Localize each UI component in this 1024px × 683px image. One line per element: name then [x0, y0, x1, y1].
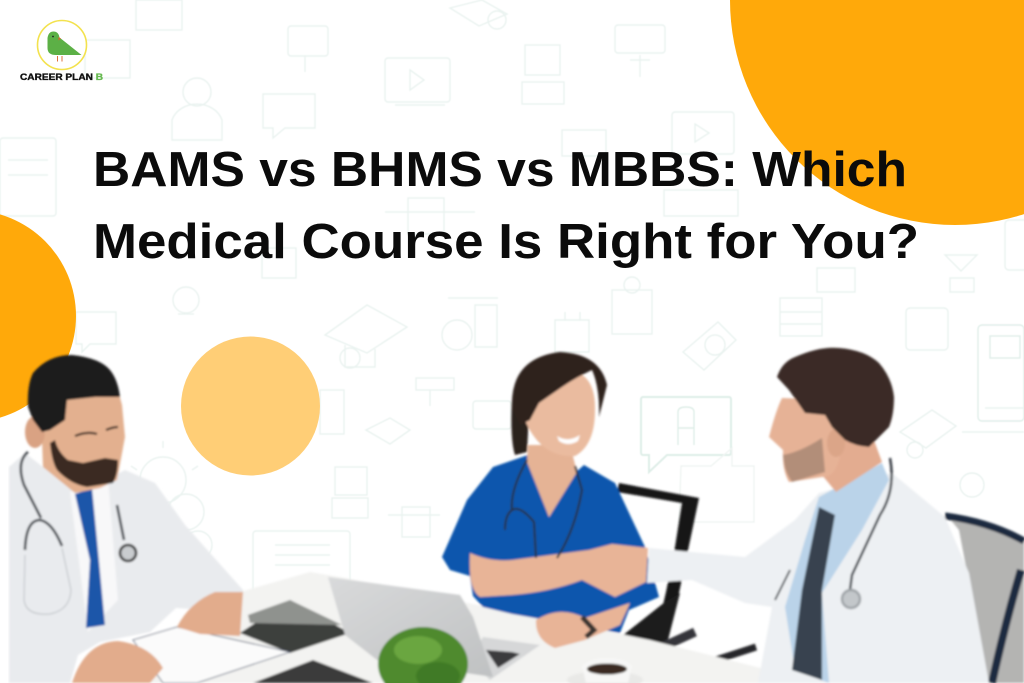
white coat [647, 473, 989, 683]
neck [527, 445, 577, 517]
title line 1: BAMS vs BHMS vs MBBS: Which [93, 143, 907, 197]
title line 2: Medical Course Is Right for You? [93, 215, 919, 269]
light blue shirt [785, 463, 889, 683]
left doctor [9, 355, 243, 683]
green plant [378, 627, 468, 683]
lower hand [72, 641, 163, 683]
stethoscope [21, 452, 136, 614]
logo wordmark: CAREER PLAN B [20, 72, 104, 82]
face [524, 370, 595, 456]
watch [582, 617, 594, 637]
dark tablet [253, 660, 373, 683]
white coat [9, 453, 243, 683]
right doctor [647, 348, 989, 683]
blue scrubs [442, 455, 659, 633]
hair [512, 352, 607, 425]
logo ring [38, 20, 86, 70]
nurse [442, 352, 659, 648]
neck and face [822, 425, 882, 492]
arm to handshake [470, 544, 648, 597]
dark tie [792, 507, 835, 680]
hair [777, 348, 894, 447]
circle: left orange [0, 210, 76, 422]
hand on clipboard [177, 592, 243, 636]
ponytail and hair back [511, 395, 530, 455]
circle: light yellow [181, 336, 320, 476]
clipboard [133, 627, 290, 683]
table top [70, 572, 820, 683]
neck and face [42, 385, 125, 493]
left white cutoff strip of photo [0, 423, 8, 683]
title [93, 143, 919, 269]
beard [783, 438, 825, 482]
shirt [70, 478, 118, 632]
logo: Career Plan B [20, 20, 104, 82]
coffee cup [567, 658, 643, 683]
stethoscope on scrubs [505, 460, 582, 558]
blue tie [75, 488, 105, 628]
laptop [328, 577, 540, 680]
chair behind right doctor [716, 513, 1024, 683]
hands on table [536, 603, 630, 648]
circle: top right orange [730, 0, 1024, 225]
icon: green bird [48, 32, 82, 62]
folder on table [240, 600, 350, 653]
photo: three doctors at a table [9, 348, 1024, 683]
chair behind nurse [617, 483, 699, 648]
stethoscope [775, 458, 892, 608]
hair [28, 355, 120, 432]
beard [50, 440, 118, 487]
